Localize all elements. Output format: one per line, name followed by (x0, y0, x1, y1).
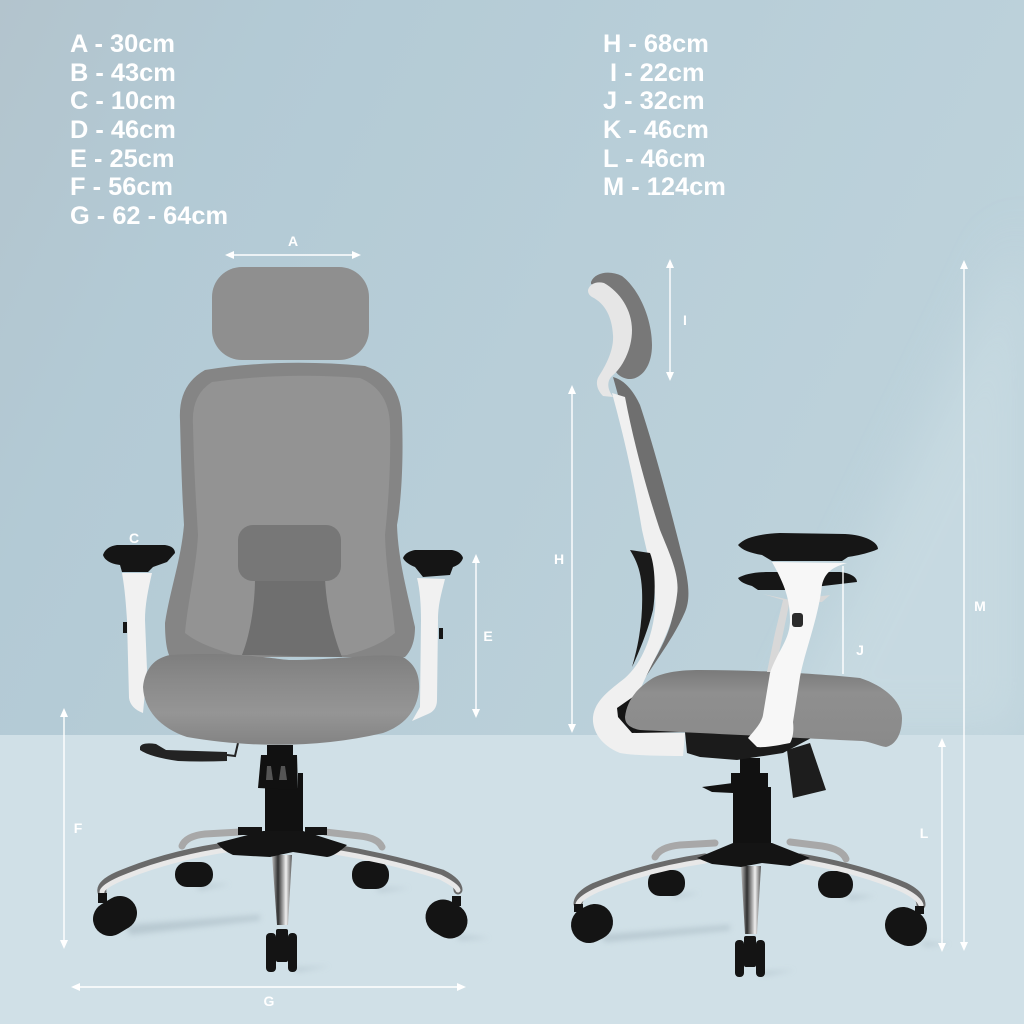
under-seat dark gap (617, 692, 686, 733)
gas lift (702, 758, 771, 843)
floor shadows (600, 893, 950, 976)
gas lift (258, 745, 303, 833)
dimension letters: M (974, 598, 986, 614)
dimension list: right column: H - 68cm (603, 30, 709, 58)
arm support (748, 562, 847, 747)
white armrest supports (122, 573, 445, 721)
base legs (102, 846, 458, 892)
base hub (217, 827, 347, 857)
dimension list: left column: A - 30cm (70, 30, 175, 58)
dimension list: right column (603, 30, 726, 201)
backrest inner mesh (185, 376, 395, 657)
dimension letters: I (683, 312, 687, 328)
background: wall (0, 0, 1024, 735)
background: light streak (780, 230, 1024, 735)
seat mechanism (685, 732, 813, 760)
arrow: L (938, 738, 946, 952)
dimension letters: E (483, 628, 493, 644)
dimension list: right column: L - 46cm (603, 145, 706, 173)
arrow: A (225, 251, 361, 259)
dimension list: left column: G - 62 - 64cm (70, 202, 228, 230)
dimension list: left column (70, 30, 228, 230)
dimension list: right column: K - 46cm (603, 116, 709, 144)
mesh back (613, 377, 688, 685)
dimension list: right column: J - 32cm (603, 87, 705, 115)
arrow: F (60, 708, 68, 949)
dimension letters: A (288, 233, 298, 249)
dimension list: left column: F - 56cm (70, 173, 173, 201)
dimension letters: J (856, 642, 864, 658)
dimension arrows (60, 251, 968, 991)
dimension list: right column: M - 124cm (603, 173, 726, 201)
front casters (98, 893, 461, 972)
dimension letters: H (554, 551, 564, 567)
lumbar support (238, 525, 342, 657)
dimension letters: C (129, 530, 139, 546)
foot lever (140, 743, 238, 762)
seat cushion (143, 654, 419, 745)
top armrest (738, 533, 878, 561)
front casters (574, 904, 924, 977)
headrest (588, 273, 652, 397)
rear casters (648, 870, 853, 898)
side chair (574, 273, 950, 977)
arm button (792, 613, 803, 627)
background: floor (0, 735, 1024, 1024)
dimension list: left column: C - 10cm (70, 87, 176, 115)
seat cushion (625, 670, 902, 747)
dimension letters: L (920, 825, 929, 841)
dimension letters (74, 233, 986, 1009)
base hub (697, 843, 810, 867)
rear base legs (655, 842, 846, 859)
floor shadows (125, 884, 490, 972)
base legs (578, 858, 921, 905)
back frame (593, 393, 685, 756)
arrow: G (71, 983, 466, 991)
arrow: M (960, 260, 968, 951)
arrow: E (472, 554, 480, 718)
dimension list: left column: E - 25cm (70, 145, 174, 173)
center leg (741, 866, 761, 934)
tilt knob (787, 743, 826, 798)
center leg (272, 855, 292, 925)
front chair (98, 267, 490, 972)
dimension list: left column: B - 43cm (70, 59, 176, 87)
arrow: J (842, 566, 844, 674)
rear armrest (738, 572, 857, 672)
dimension list: left column: D - 46cm (70, 116, 176, 144)
headrest (212, 267, 369, 360)
left arm pad (103, 545, 175, 633)
right arm pad (403, 550, 463, 639)
dimension list: right column: I - 22cm (610, 59, 705, 87)
backrest mesh (165, 363, 415, 657)
arrow: H (568, 385, 576, 733)
rear base legs (182, 832, 382, 847)
arrow: I (666, 259, 674, 381)
rear casters (175, 861, 389, 889)
dimension letters: F (74, 820, 83, 836)
lumbar bracket (630, 550, 655, 667)
dimension letters: G (264, 993, 275, 1009)
